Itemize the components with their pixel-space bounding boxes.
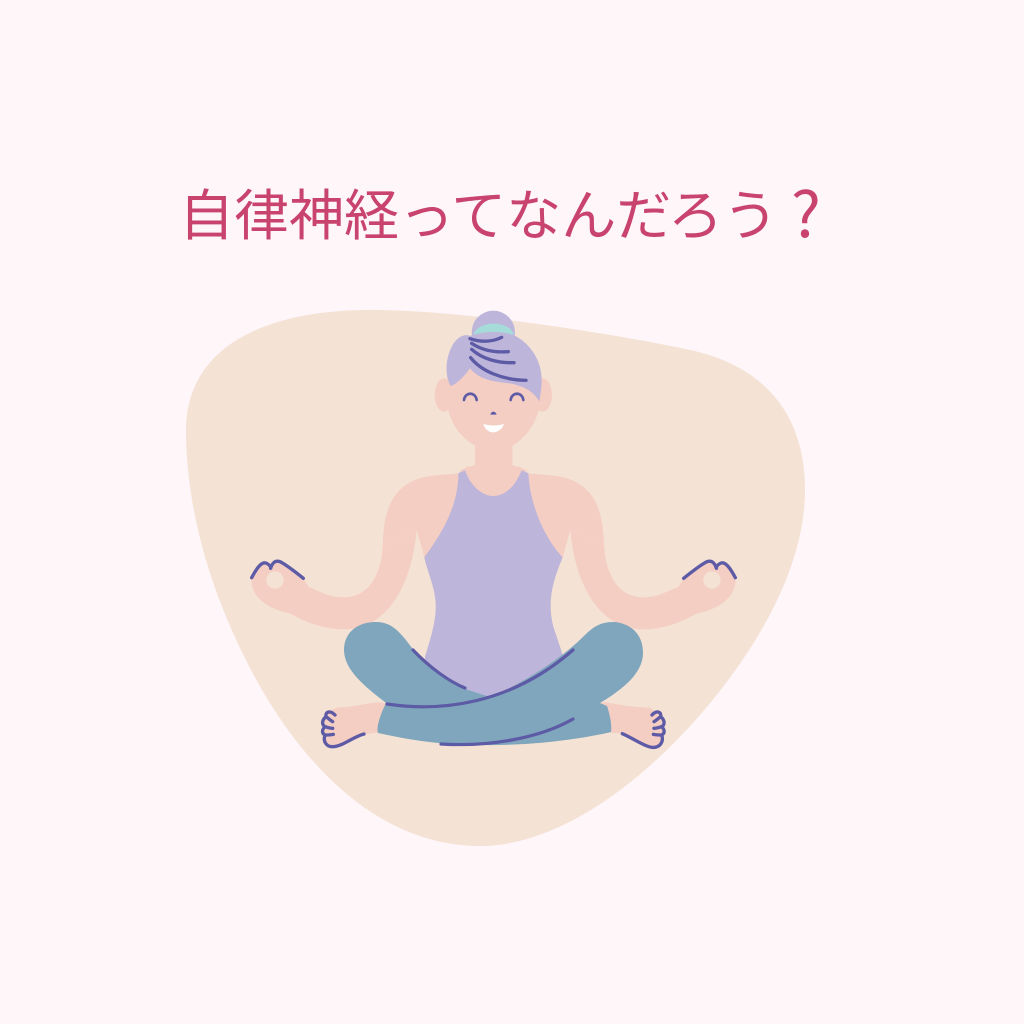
trouser fold lines bbox=[387, 650, 573, 745]
hair bbox=[447, 332, 542, 402]
hair band bbox=[473, 324, 514, 338]
neck bbox=[458, 427, 528, 471]
shoulders skin bbox=[383, 467, 604, 557]
title: ? bbox=[791, 165, 821, 256]
title: 自律神経ってなんだろう bbox=[179, 171, 778, 251]
right foot bbox=[600, 702, 664, 747]
meditating woman bbox=[252, 311, 735, 747]
right arm and hand bbox=[570, 530, 735, 629]
hair bun bbox=[472, 311, 515, 354]
eyes bbox=[464, 394, 523, 400]
hair strands bbox=[470, 337, 526, 380]
left arm and hand bbox=[252, 530, 417, 629]
head bbox=[435, 311, 552, 471]
trousers bbox=[344, 622, 643, 745]
left foot bbox=[322, 702, 386, 747]
beige background blob bbox=[186, 310, 805, 846]
tank top bbox=[424, 470, 563, 700]
face bbox=[447, 367, 540, 446]
smile bbox=[483, 424, 504, 432]
nose bbox=[490, 412, 497, 415]
ears bbox=[435, 378, 453, 412]
torso and shoulders bbox=[383, 467, 604, 700]
crossed legs bbox=[344, 622, 643, 745]
